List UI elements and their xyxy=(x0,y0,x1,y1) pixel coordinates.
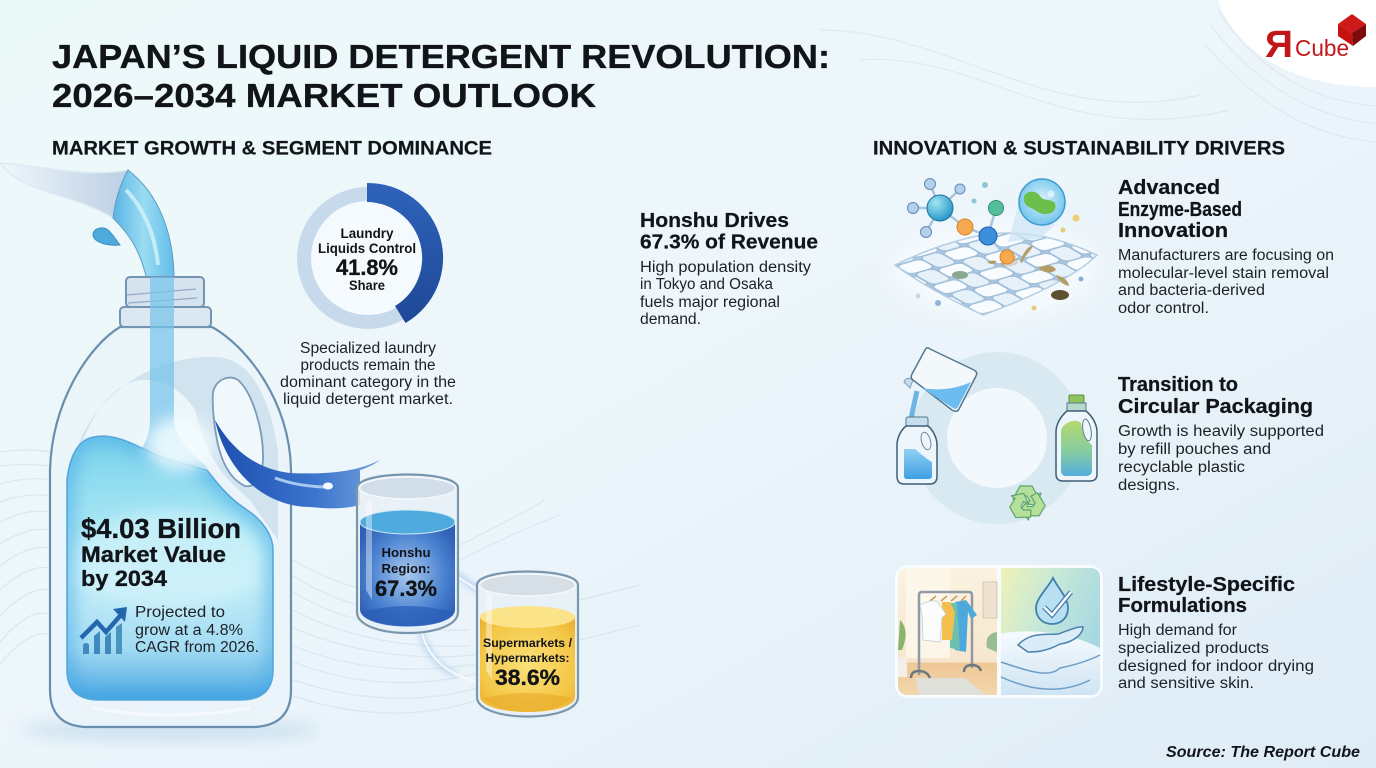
body: lifestyle formulations: and sensitive skin. xyxy=(1118,675,1254,692)
illustration: indoor drying and sensitive skin xyxy=(895,565,1103,698)
laundry description: dominant category in the xyxy=(280,374,456,391)
bottle illustration xyxy=(0,163,320,741)
liquid fill xyxy=(67,436,273,700)
donut label: Liquids Control xyxy=(318,241,416,256)
logo xyxy=(1218,0,1376,87)
logo cube icon xyxy=(1338,14,1366,46)
beaker label xyxy=(375,546,437,601)
Honshu callout: in Tokyo and Osaka xyxy=(640,276,773,293)
woven fabric xyxy=(895,233,1097,315)
pouring spout xyxy=(0,163,128,218)
heading: lifestyle formulations xyxy=(1118,573,1295,617)
Honshu callout: Honshu Drives xyxy=(640,209,789,232)
beaker label: Hypermarkets: xyxy=(486,651,570,665)
heading: circular packaging: Circular Packaging xyxy=(1118,395,1313,418)
growth text xyxy=(135,604,259,656)
donut segment 41.8% xyxy=(367,183,443,323)
blue refill bottle xyxy=(897,417,937,484)
icon: growth chart xyxy=(81,607,127,654)
beaker label xyxy=(483,636,573,690)
growth text: CAGR from 2026. xyxy=(135,639,259,656)
donut chart: laundry liquids xyxy=(304,183,443,323)
ring xyxy=(929,370,1065,506)
section heading: innovation: INNOVATION & SUSTAINABILITY DRIVERS xyxy=(873,138,1285,160)
Honshu callout: High population density xyxy=(640,259,811,276)
icon: recycle xyxy=(1005,486,1049,524)
green recycled bottle xyxy=(1056,395,1097,481)
laundry description: Specialized laundry xyxy=(300,340,436,357)
beaker: supermarkets xyxy=(477,572,578,716)
stream inside bottle xyxy=(135,277,208,468)
title: JAPAN’S LIQUID DETERGENT REVOLUTION: xyxy=(52,39,830,76)
illustration: enzyme molecule and fabric xyxy=(890,178,1100,320)
body: circular packaging: designs. xyxy=(1118,477,1180,494)
drop xyxy=(93,228,120,245)
heading: enzyme innovation: Advanced xyxy=(1118,176,1220,199)
neck xyxy=(126,277,204,307)
panel: sensitive skin xyxy=(1001,568,1100,695)
heading: lifestyle formulations: Lifestyle-Specific xyxy=(1118,573,1295,596)
beaker label: Honshu xyxy=(382,546,430,560)
body: circular packaging: by refill pouches and xyxy=(1118,441,1271,458)
body: circular packaging: recyclable plastic xyxy=(1118,459,1245,476)
beaker label: 38.6% xyxy=(495,665,560,690)
body: lifestyle formulations: specialized products xyxy=(1118,640,1269,657)
laundry description: liquid detergent market. xyxy=(283,391,453,408)
growth text: Projected to xyxy=(135,604,225,621)
body: lifestyle formulations: designed for indoor drying xyxy=(1118,658,1314,675)
heading: enzyme innovation xyxy=(1118,176,1242,242)
body: lifestyle formulations xyxy=(1118,622,1314,692)
liquid stream xyxy=(113,170,174,280)
hand xyxy=(1018,627,1083,652)
body: circular packaging xyxy=(1118,423,1324,494)
body: enzyme innovation: and bacteria-derived xyxy=(1118,282,1265,299)
stains xyxy=(952,246,1069,300)
donut label: Laundry xyxy=(340,226,394,241)
donut label xyxy=(318,226,416,293)
floating particles xyxy=(916,182,1084,310)
Honshu callout: demand. xyxy=(640,311,701,328)
bottle body xyxy=(50,327,291,727)
body: enzyme innovation: Manufacturers are focusing on xyxy=(1118,247,1334,264)
beaker label: 67.3% xyxy=(375,576,437,601)
bottle text: market value xyxy=(81,513,241,591)
heading: enzyme innovation: Innovation xyxy=(1118,219,1228,242)
title: 2026–2034 MARKET OUTLOOK xyxy=(52,78,596,115)
source note: Source: The Report Cube xyxy=(1166,744,1360,761)
beaker: Honshu region xyxy=(357,474,458,633)
handle hole xyxy=(213,378,263,486)
body: lifestyle formulations: High demand for xyxy=(1118,622,1237,639)
Honshu callout: fuels major regional xyxy=(640,294,780,311)
donut label: 41.8% xyxy=(336,255,398,280)
beaker liquid xyxy=(480,617,575,712)
body: enzyme innovation: odor control. xyxy=(1118,300,1209,317)
beaker label: Region: xyxy=(382,562,430,576)
handle band xyxy=(72,357,278,540)
bottle text: market value: Market Value xyxy=(81,542,226,567)
towel xyxy=(1001,631,1100,695)
beaker label: Supermarkets / xyxy=(483,636,573,650)
body: enzyme innovation xyxy=(1118,247,1334,317)
Honshu callout xyxy=(640,209,818,328)
Honshu callout: 67.3% of Revenue xyxy=(640,230,818,254)
heading: circular packaging: Transition to xyxy=(1118,373,1238,396)
water drop check xyxy=(1036,578,1068,624)
laundry description xyxy=(280,340,456,408)
bottle text: market value: $4.03 Billion xyxy=(81,513,241,544)
body: circular packaging: Growth is heavily supported xyxy=(1118,423,1324,440)
heading: enzyme innovation: Enzyme-Based xyxy=(1118,198,1242,221)
logo wordmark: Я xyxy=(1265,24,1293,66)
blue swoosh from handle to beaker xyxy=(215,420,380,508)
bottle text: market value: by 2034 xyxy=(81,566,168,591)
laundry description: products remain the xyxy=(300,357,436,374)
refill pouch xyxy=(904,348,977,420)
heading: lifestyle formulations: Formulations xyxy=(1118,594,1247,617)
heading: circular packaging xyxy=(1118,373,1313,418)
molecule xyxy=(913,184,1007,257)
growth text: grow at a 4.8% xyxy=(135,622,243,639)
beaker liquid xyxy=(360,522,455,626)
panel: indoor drying rack xyxy=(898,568,997,695)
title xyxy=(52,39,830,115)
illustration: circular packaging xyxy=(897,348,1097,524)
section heading: market growth: MARKET GROWTH & SEGMENT DOMINANCE xyxy=(52,138,492,160)
connector lines between beakers xyxy=(421,574,478,682)
body: enzyme innovation: molecular-level stain removal xyxy=(1118,265,1329,282)
hanging clothes xyxy=(920,596,977,652)
logo cube name: Cube xyxy=(1295,35,1349,61)
magnifier bubble xyxy=(1008,203,1055,242)
donut label: Share xyxy=(349,278,385,293)
collar xyxy=(120,307,211,327)
